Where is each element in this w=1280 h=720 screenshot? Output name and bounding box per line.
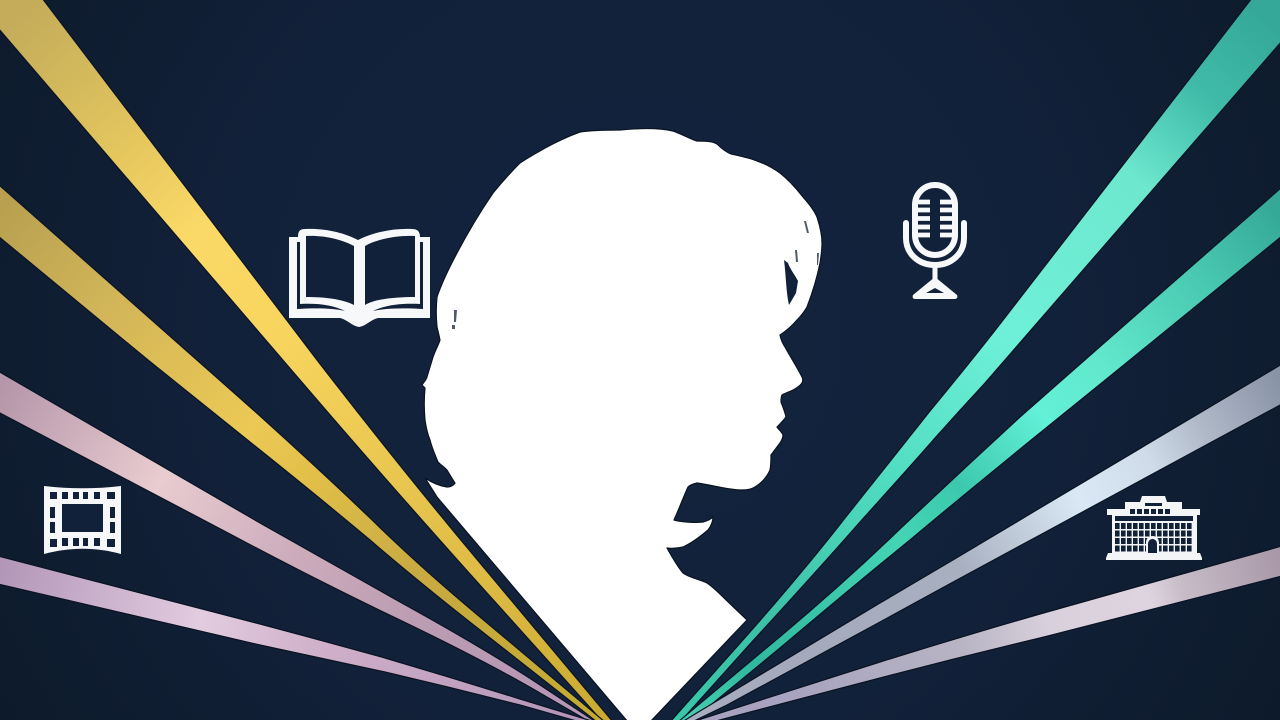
icon: open book — [289, 229, 430, 327]
icon: museum building — [1106, 496, 1202, 560]
icon: film frame — [44, 486, 121, 554]
ray: lilac lower — [692, 546, 1280, 720]
film sprocket holes — [50, 492, 115, 547]
ray: silver upper — [682, 364, 1280, 720]
icon: microphone — [906, 185, 964, 299]
silhouette: profile of a head tapering to a point — [422, 129, 822, 720]
ray: pink upper — [0, 371, 596, 720]
film window — [62, 504, 103, 532]
rays: right fan — [670, 0, 1280, 720]
rays: left fan — [0, 0, 613, 720]
ray: teal lower — [678, 187, 1280, 720]
hair detail: dark strand near temple — [784, 260, 798, 305]
ray: pink lower — [0, 556, 595, 720]
ray: yellow upper — [0, 0, 613, 720]
ray: teal upper — [670, 0, 1280, 720]
hair detail: small marks — [452, 221, 819, 329]
ray: yellow lower — [0, 184, 605, 720]
